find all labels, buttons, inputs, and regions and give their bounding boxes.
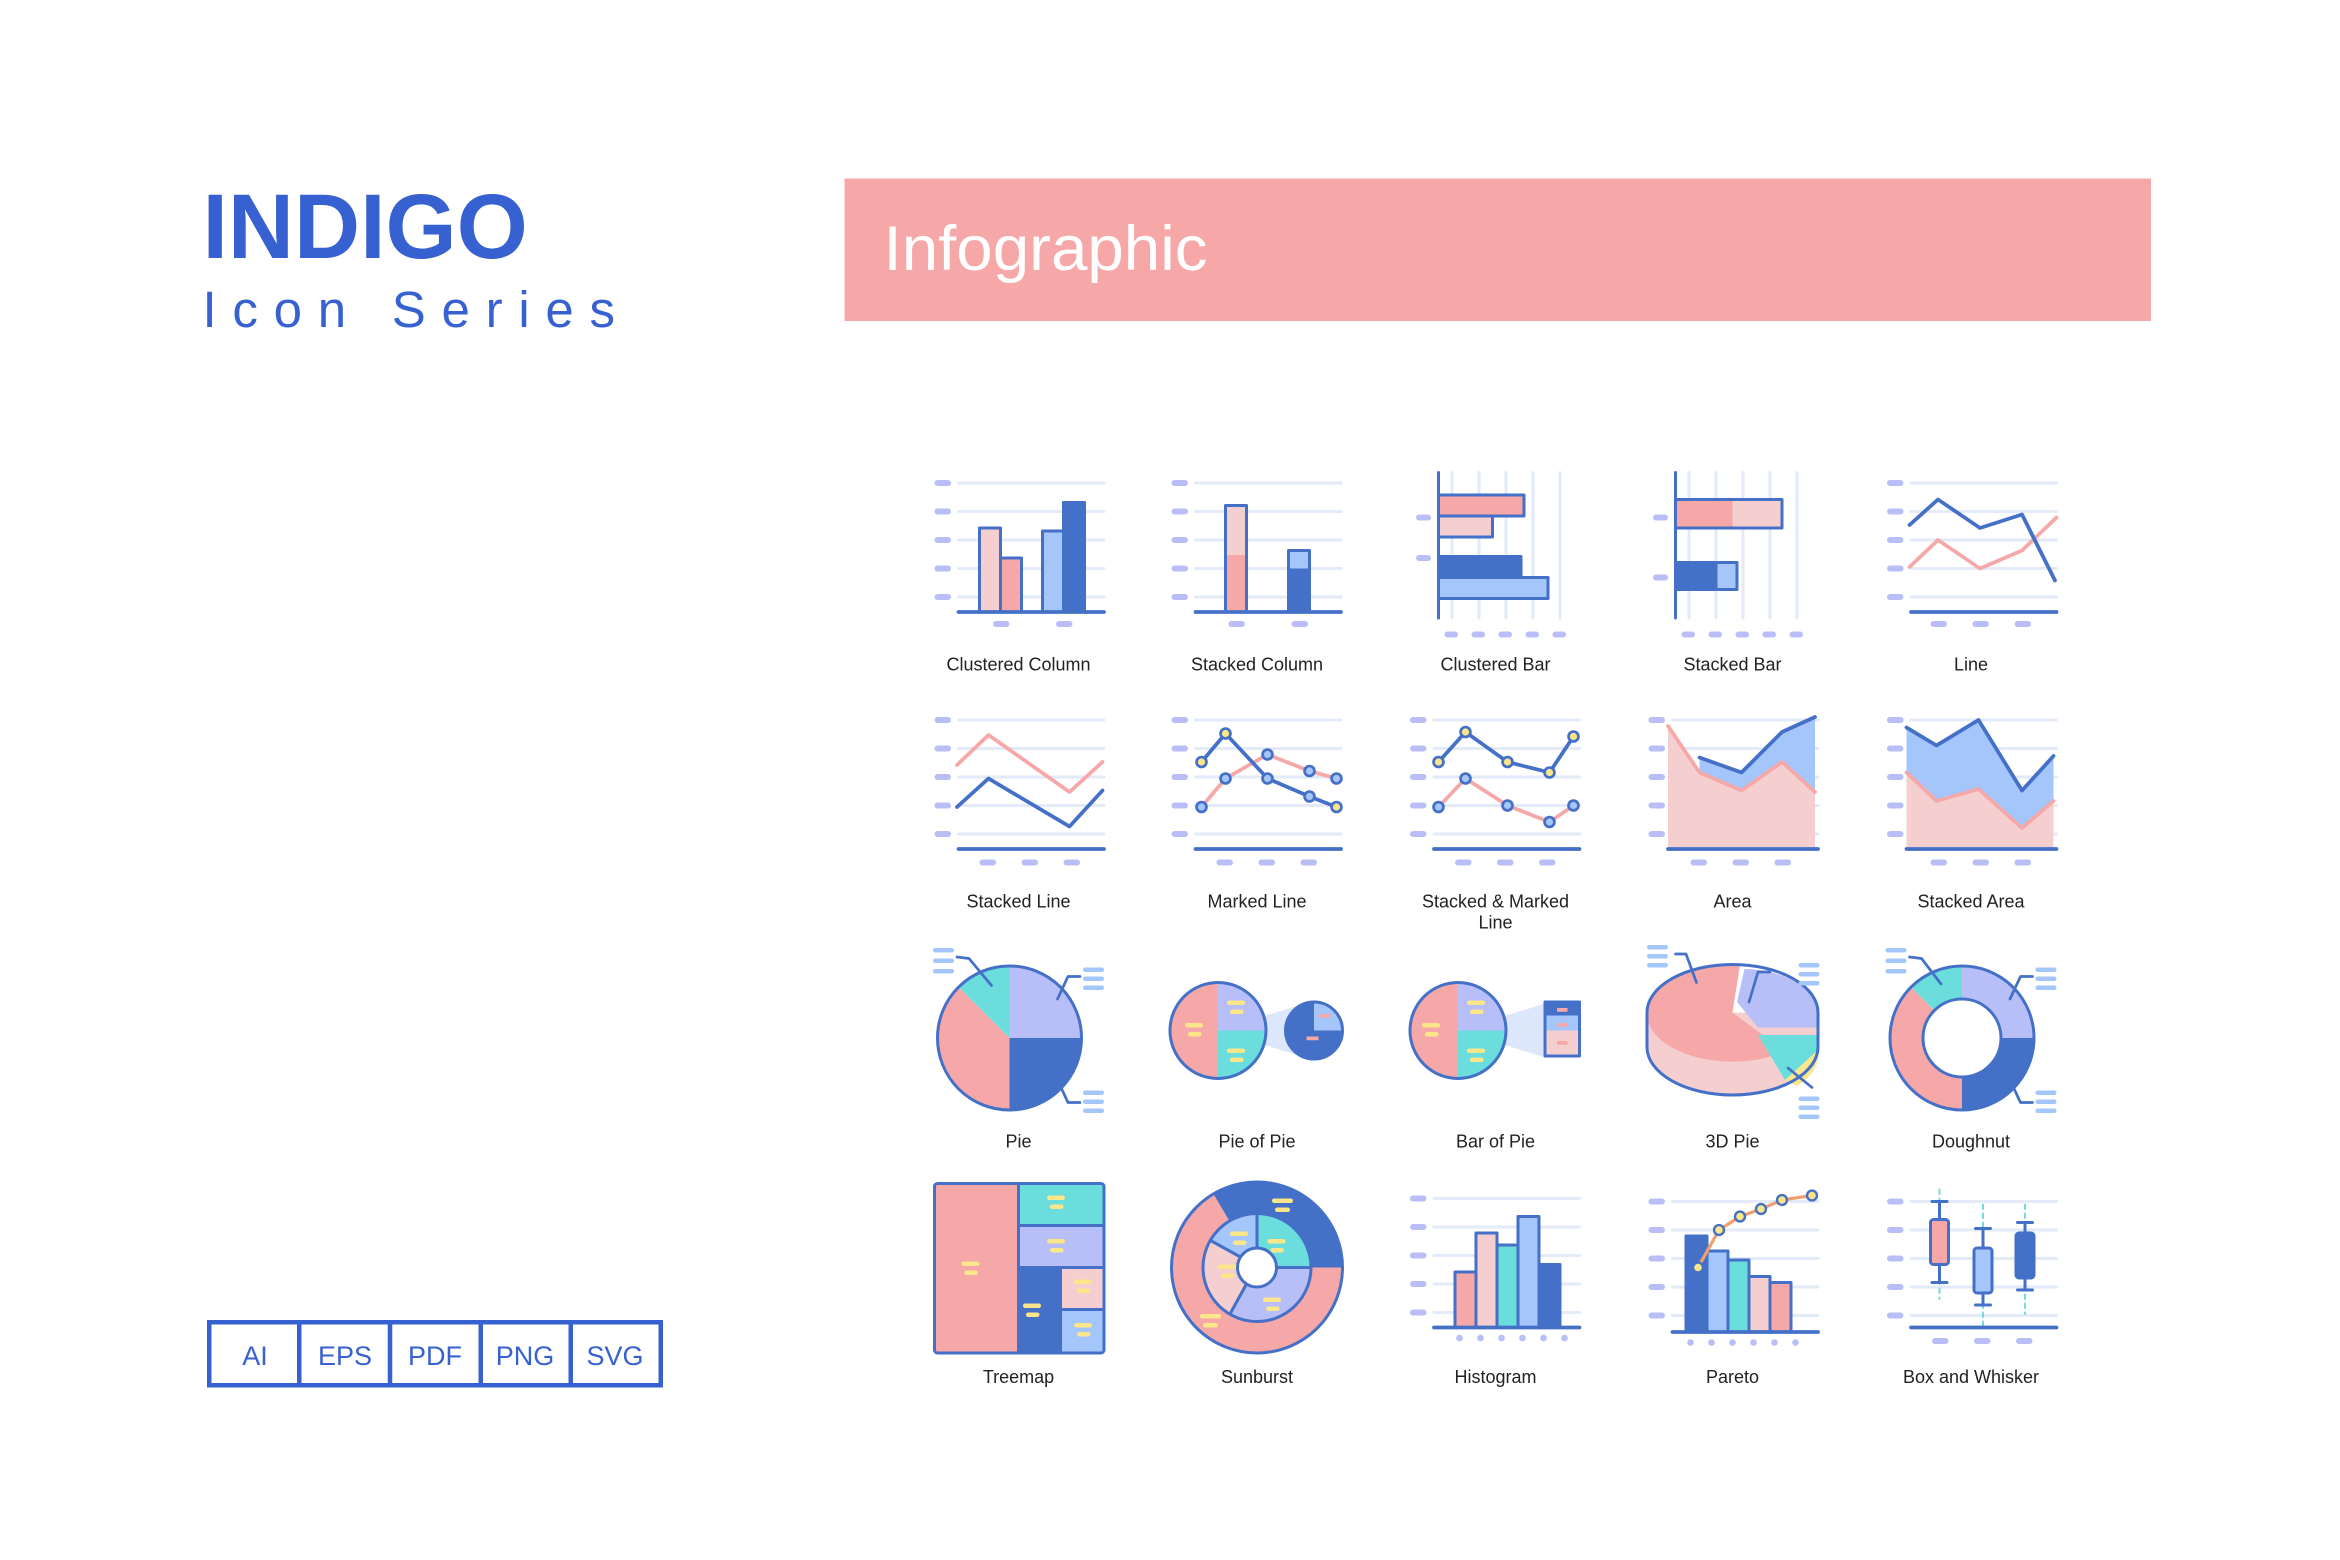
labels: Clustered Bar: [1440, 655, 1551, 675]
labels: Stacked Bar: [1683, 655, 1782, 675]
labels: [946, 654, 2039, 1387]
labels: 3D Pie: [1705, 1132, 1760, 1152]
format boxes: [209, 1322, 661, 1386]
labels: Pareto: [1706, 1367, 1759, 1387]
format boxes: PDF: [408, 1341, 462, 1371]
labels: Box and Whisker: [1903, 1367, 2039, 1387]
format boxes: EPS: [318, 1341, 372, 1371]
format boxes: SVG: [586, 1341, 644, 1371]
format boxes: PNG: [496, 1341, 554, 1371]
icon: stacked line: [934, 717, 1104, 866]
icon: sunburst: [1172, 1182, 1342, 1353]
format boxes: AI: [242, 1341, 268, 1371]
subtitle: Icon Series: [202, 281, 615, 338]
icon: stacked area: [1887, 717, 2056, 866]
icon: marked line: [1172, 717, 1341, 866]
labels: Area: [1713, 892, 1752, 912]
banner: [844, 178, 2151, 321]
labels: Stacked & Marked: [1422, 892, 1569, 912]
labels: Treemap: [983, 1367, 1054, 1387]
labels: Sunburst: [1221, 1367, 1293, 1387]
icon: 3D pie: [1647, 945, 1820, 1119]
icon: stacked bar: [1653, 472, 1803, 638]
labels: Stacked Line: [966, 892, 1071, 912]
labels: Line: [1954, 655, 1988, 675]
labels: Clustered Column: [946, 655, 1091, 675]
icon: histogram: [1410, 1196, 1580, 1341]
labels: Pie: [1005, 1132, 1032, 1152]
title: INDIGO: [202, 176, 528, 278]
icon: stacked column: [1172, 480, 1341, 627]
icon: area: [1648, 717, 1818, 866]
banner: Infographic: [884, 214, 1208, 284]
icon: bar of pie: [1410, 982, 1580, 1078]
icon: treemap: [934, 1184, 1104, 1353]
icon: pareto: [1648, 1191, 1818, 1346]
icon: pie of pie: [1170, 982, 1342, 1078]
labels: Stacked Area: [1917, 892, 2026, 912]
icon: pie: [933, 948, 1104, 1113]
icon: box and whisker: [1887, 1190, 2056, 1344]
labels: Bar of Pie: [1456, 1132, 1535, 1152]
icon: clustered column: [934, 480, 1104, 627]
labels: Pie of Pie: [1218, 1132, 1296, 1152]
icon: doughnut: [1886, 948, 2056, 1113]
labels: Stacked Column: [1191, 655, 1323, 675]
icon: line: [1887, 480, 2056, 627]
labels: Histogram: [1454, 1367, 1537, 1387]
labels: Doughnut: [1932, 1132, 2010, 1152]
labels: Marked Line: [1207, 892, 1307, 912]
labels: Line: [1478, 913, 1513, 933]
icon: clustered bar: [1416, 472, 1566, 638]
icon: stacked and marked line: [1410, 717, 1580, 866]
